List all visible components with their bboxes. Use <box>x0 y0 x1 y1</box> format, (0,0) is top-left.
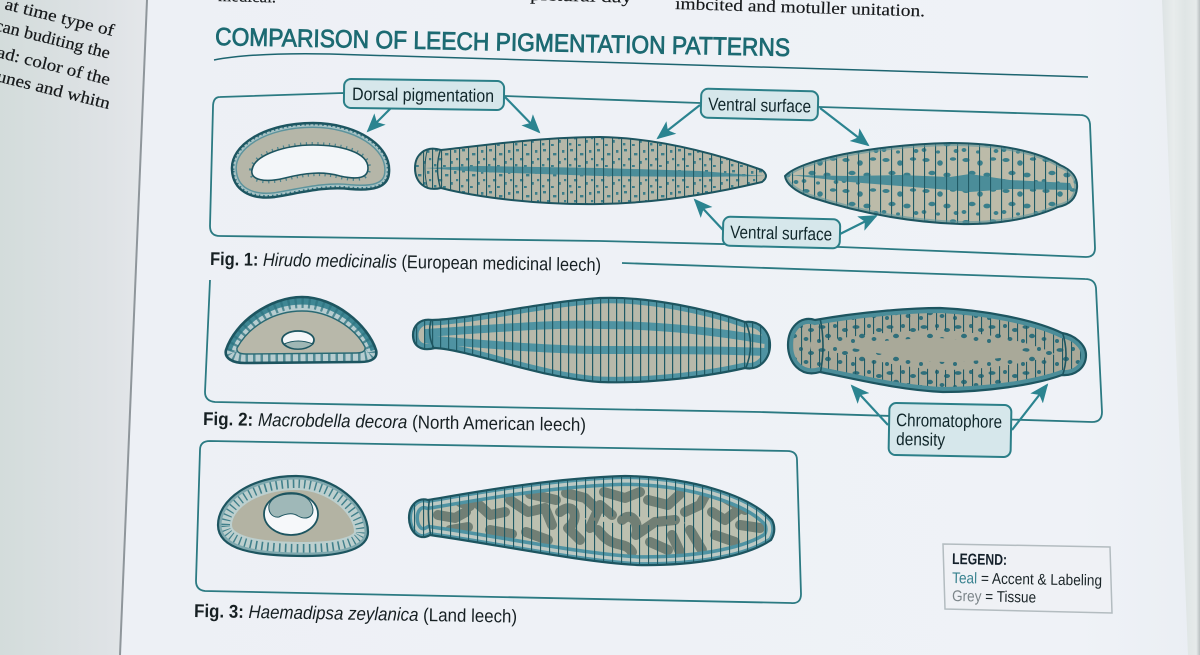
callout: ventral surface (top): Ventral surface <box>708 94 811 117</box>
legend <box>943 544 1112 613</box>
callout: dorsal pigmentation: Dorsal pigmentation <box>352 84 494 106</box>
panel: figure 1 Hirudo medicinalis <box>210 79 1095 257</box>
callout: chromatophore density: Chromatophore <box>896 410 1002 432</box>
callout: ventral surface (bottom) <box>695 200 876 248</box>
title: COMPARISON OF LEECH PIGMENTATION PATTERNS <box>215 23 790 62</box>
caption: figure 1: Fig. 1: Hirudo medicinalis (European medicinal leech) <box>210 248 601 275</box>
callout: chromatophore density <box>852 385 1047 457</box>
callout: ventral surface (top) <box>658 89 868 145</box>
callout: chromatophore density: density <box>896 429 945 450</box>
legend: Grey = Tissue <box>952 588 1036 606</box>
legend: Teal = Accent & Labeling <box>952 570 1102 590</box>
leech: Macrobdella dorsal view <box>412 296 772 384</box>
panel: figure 2 Macrobdella decora <box>205 263 1102 457</box>
caption: figure 2: Fig. 2: Macrobdella decora (North American leech) <box>203 408 586 435</box>
top body text fragment <box>218 0 925 20</box>
title underline <box>214 54 1088 77</box>
callout: dorsal pigmentation <box>344 79 539 132</box>
leech: Hirudo ventral view <box>780 140 1080 230</box>
cross section: Macrobdella <box>226 297 376 363</box>
left page text fragment <box>0 0 117 113</box>
leech: Haemadipsa dorsal view <box>409 476 774 565</box>
cross section: Haemadipsa <box>218 476 368 556</box>
callout: ventral surface (bottom): Ventral surface <box>730 222 832 244</box>
leech: Hirudo dorsal view <box>414 136 767 206</box>
cross section: Hirudo <box>232 123 389 198</box>
legend: LEGEND: <box>952 551 1007 569</box>
leech: Macrobdella ventral view <box>788 308 1086 392</box>
panel: figure 3 Haemadipsa zeylanica <box>196 441 801 603</box>
caption: figure 3: Fig. 3: Haemadipsa zeylanica (Land leech) <box>194 600 517 627</box>
